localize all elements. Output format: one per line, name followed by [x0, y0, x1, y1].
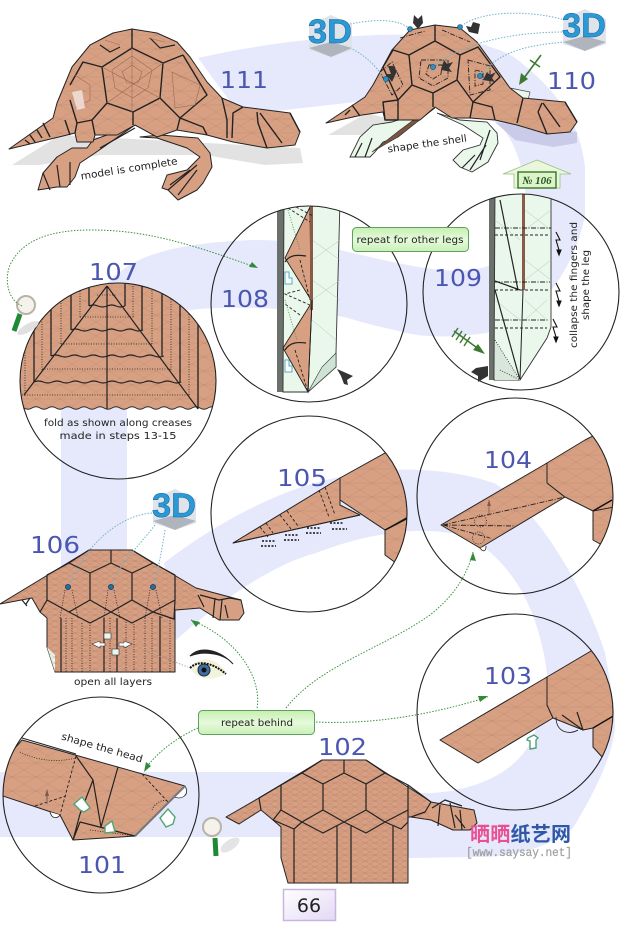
pleat arrows 109 — [553, 232, 561, 342]
open-layer arrows — [92, 633, 132, 655]
panel: step 108 — [211, 200, 407, 402]
step 111: completed turtle model — [9, 29, 303, 200]
number 109: 109 — [434, 266, 482, 292]
icon: magnifier top — [14, 296, 40, 337]
watermark — [466, 823, 572, 860]
watermark: [www.saysay.net] — [466, 847, 572, 860]
callout: repeat for other legs — [352, 228, 468, 252]
watermark: 晒晒纸艺网 — [470, 823, 571, 846]
step 110: shape the shell — [326, 25, 577, 172]
icon: 3D cube right: 3D — [562, 7, 606, 45]
badge: see step 106: № 106 — [521, 175, 552, 187]
icon: push arrow 108 — [337, 369, 353, 385]
page number box: 66 — [297, 895, 321, 917]
icon: black arrow 109 — [471, 366, 488, 382]
panel: step 104 — [417, 398, 620, 594]
caption: collapse the fingers: shape the leg — [581, 250, 592, 320]
icon: 3D cube lower: 3D — [152, 487, 196, 525]
caption: open all layers: open all layers — [74, 677, 152, 688]
blue dot links on step 106 — [65, 513, 165, 590]
number 103: 103 — [484, 664, 532, 690]
panel: step 109 — [0, 190, 620, 920]
caption: fold along creases: made in steps 13-15 — [60, 431, 176, 442]
panel: step 105 — [211, 416, 420, 612]
number 108: 108 — [221, 287, 269, 313]
number 105: 105 — [277, 466, 327, 492]
number 101: 101 — [78, 853, 126, 879]
step 106 model — [0, 550, 244, 672]
callout: repeat behind: repeat behind — [221, 718, 293, 729]
icon: eye — [148, 650, 233, 679]
callout: repeat behind — [198, 710, 314, 734]
icon: 3D cube left: 3D — [308, 13, 352, 51]
number 106: 106 — [30, 533, 80, 559]
badge: see step 106 — [503, 160, 571, 188]
dotted links from repeat behind — [144, 552, 488, 772]
pleat arrow marks — [261, 523, 347, 546]
dotted link from magnifier to step 108 — [7, 230, 258, 306]
icon: magnifier bottom — [203, 818, 242, 856]
caption: fold along creases: fold as shown along creases — [44, 418, 192, 429]
icon: green arrow — [519, 55, 541, 85]
page number box — [284, 890, 336, 920]
caption: collapse the fingers — [569, 222, 592, 348]
icon: green arrow 109 — [452, 328, 485, 354]
caption: collapse the fingers: collapse the fingers and — [569, 222, 580, 348]
panel: step 107 — [19, 282, 217, 480]
number 102: 102 — [318, 735, 367, 761]
label: shape the shell: shape the shell — [387, 133, 468, 155]
number 107: 107 — [89, 260, 138, 286]
panel: step 101 — [0, 697, 199, 893]
callout: repeat for other legs: repeat for other legs — [356, 235, 464, 246]
caption: fold along creases — [44, 418, 192, 442]
push arrows and marker dots on shell — [350, 13, 565, 82]
label: shape the head: shape the head — [60, 732, 144, 765]
panel: step 103 — [417, 614, 620, 810]
step 102 model — [226, 760, 477, 883]
number 104: 104 — [484, 448, 532, 474]
label: model is complete: model is complete — [80, 156, 178, 183]
number 111: 111 — [220, 68, 268, 94]
number 110: 110 — [547, 69, 596, 95]
